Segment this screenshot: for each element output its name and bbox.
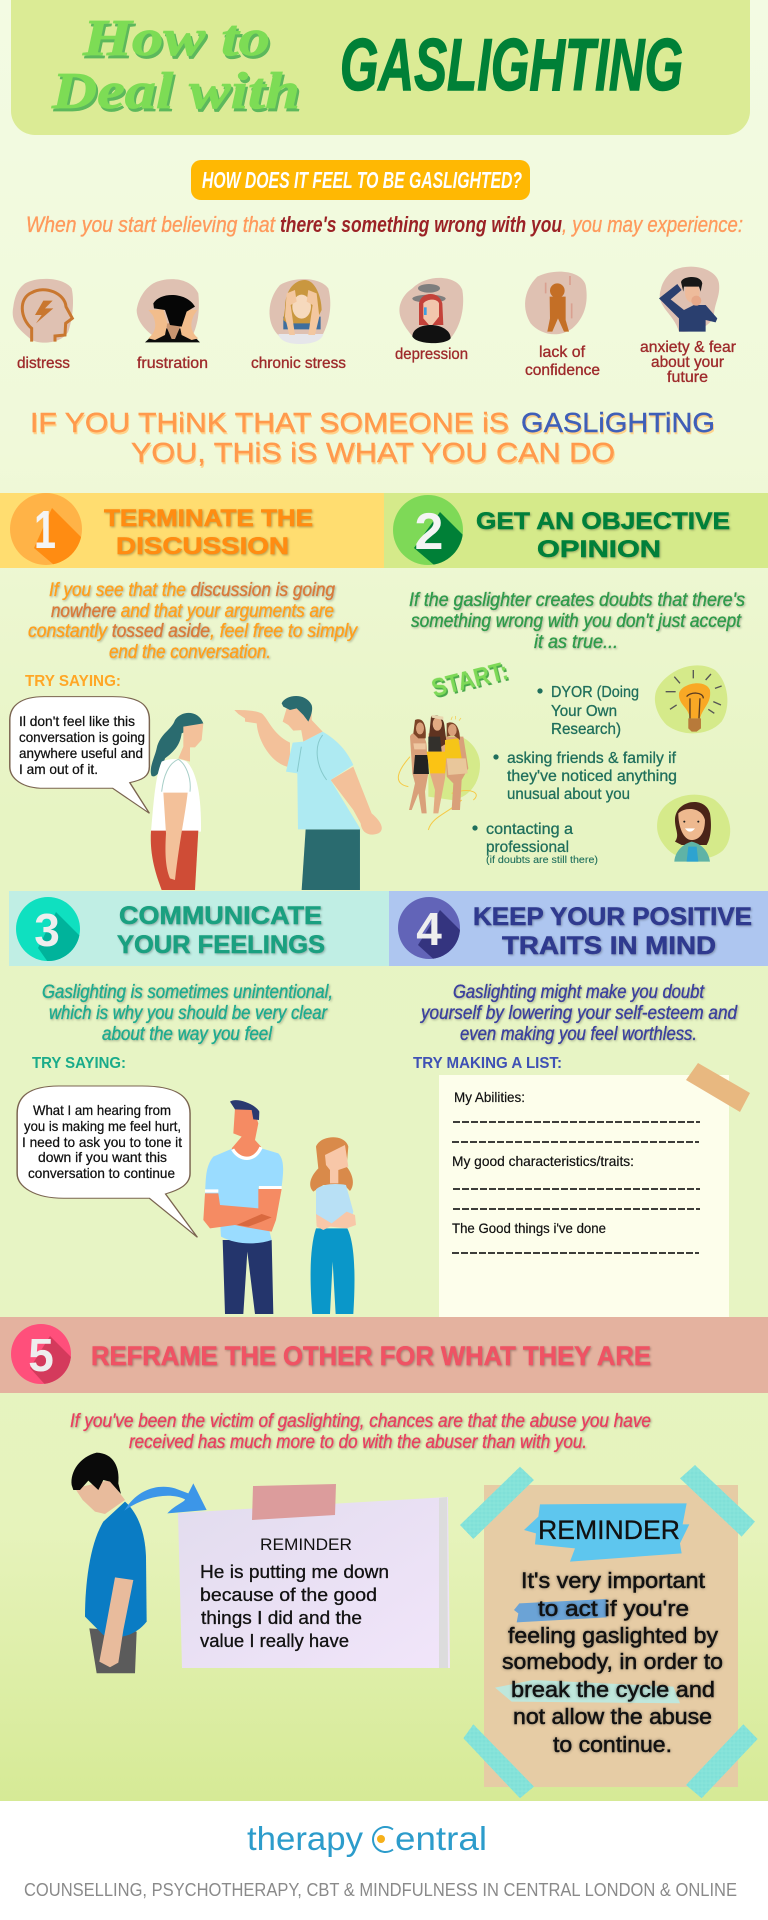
note: reminder: things I did and the bbox=[201, 1608, 362, 1628]
label: chronic stress: chronic stress bbox=[251, 355, 346, 372]
panel: step 5 bbox=[0, 1317, 768, 1798]
heading: what you can do bbox=[30, 407, 715, 468]
note: reminder: He is putting me down bbox=[200, 1562, 389, 1582]
list: research suggestions: asking friends & family if bbox=[507, 750, 677, 767]
speech bubble: step 1 bbox=[10, 697, 149, 813]
illustration: professional bbox=[657, 795, 730, 862]
label: try saying: TRY SAYING: bbox=[25, 673, 121, 690]
step 4 description: Gaslighting might make you doubt bbox=[453, 982, 705, 1003]
icon: chronic stress bbox=[270, 279, 330, 344]
step 2 title bbox=[476, 508, 730, 563]
panel: step 1 bbox=[0, 493, 384, 890]
list prompts bbox=[452, 1089, 634, 1236]
speech bubble: step 3: I need to ask you to tone it bbox=[22, 1134, 182, 1150]
band: step 4 header bbox=[389, 891, 768, 966]
step 4 title: TRAITS IN MIND bbox=[502, 932, 716, 960]
badge: number 1 bbox=[10, 493, 82, 565]
step 1 description: constantly tossed aside, feel free to simply bbox=[28, 621, 358, 642]
step 5 description bbox=[70, 1411, 651, 1453]
step 1 title bbox=[104, 505, 313, 560]
intro sentence bbox=[26, 212, 743, 237]
step 5 description: If you've been the victim of gaslighting, chances are that the abuse you have bbox=[70, 1411, 651, 1432]
list: research suggestions: unusual about you bbox=[507, 786, 630, 803]
label: anxiety and fear: anxiety & fear bbox=[640, 339, 737, 356]
icon: frustration bbox=[137, 279, 200, 342]
title: How to Deal with bbox=[51, 10, 300, 120]
badge: number 5: 5 bbox=[28, 1329, 54, 1381]
note: reminder: because of the good bbox=[200, 1585, 377, 1605]
step 1 description: end the conversation. bbox=[109, 642, 271, 663]
step 2 title: OPINION bbox=[537, 536, 661, 563]
illustration: arguing couple bbox=[151, 696, 382, 890]
speech bubble: step 1: Il don't feel like this bbox=[19, 713, 135, 729]
speech bubble: step 1: I am out of it. bbox=[19, 761, 98, 777]
step 4 description bbox=[419, 982, 738, 1045]
badge: number 4 bbox=[398, 897, 460, 959]
step 4 description: even making you feel worthless. bbox=[460, 1024, 697, 1045]
icon: lack of confidence bbox=[525, 272, 587, 334]
badge: number 4: 4 bbox=[416, 903, 442, 955]
highlights bbox=[495, 1599, 680, 1703]
note: list paper bbox=[439, 1063, 750, 1317]
swash behind reminder bbox=[524, 1503, 689, 1562]
list prompts: My Abilities: bbox=[454, 1089, 525, 1105]
step 3 description: about the way you feel bbox=[102, 1024, 273, 1045]
speech bubble: step 3: down if you want this bbox=[38, 1149, 167, 1165]
label: lack of confidence: lack of bbox=[539, 344, 586, 361]
step 5 title: REFRAME THE OTHER FOR WHAT THEY ARE bbox=[91, 1341, 651, 1371]
label: distress: distress bbox=[17, 355, 70, 372]
intro sentence: When you start believing that bbox=[26, 212, 276, 237]
step 1 description: nowhere and that your arguments are bbox=[51, 601, 334, 622]
speech bubble: step 3 bbox=[17, 1086, 197, 1237]
heading: what you can do: IF YOU THiNK THAT SOMEONE iS bbox=[30, 407, 509, 438]
step 2 description bbox=[409, 590, 745, 653]
panel: step 3 bbox=[9, 891, 389, 1314]
panel: footer bbox=[0, 1801, 768, 1920]
intro sentence: there's something wrong with you bbox=[280, 212, 562, 237]
band: step 1 header bbox=[0, 493, 384, 568]
panel: header bbox=[11, 0, 750, 135]
badge: number 2: 2 bbox=[415, 503, 443, 561]
illustration: friends bbox=[398, 715, 480, 830]
step 3 title: COMMUNICATE bbox=[119, 902, 322, 930]
speech bubble: step 3: you is making me feel hurt, bbox=[24, 1118, 181, 1134]
subheading pill: HOW DOES IT FEEL TO BE GASLIGHTED? bbox=[202, 167, 522, 193]
note: reminder bbox=[178, 1484, 450, 1668]
label: lack of confidence bbox=[525, 344, 600, 379]
card: reminder: It's very important bbox=[521, 1568, 705, 1593]
badge: number 2 bbox=[393, 495, 463, 565]
card: reminder: somebody, in order to bbox=[502, 1649, 723, 1674]
icon: light bulb bbox=[655, 665, 727, 733]
card: reminder: break the cycle and bbox=[511, 1677, 715, 1702]
logo: therapy central bbox=[247, 1820, 487, 1857]
label: start: START: bbox=[429, 657, 511, 703]
card: reminder: not allow the abuse bbox=[513, 1704, 712, 1729]
step 2 description: something wrong with you don't just accept bbox=[411, 611, 742, 632]
label: depression: depression bbox=[395, 346, 468, 363]
step 4 description: yourself by lowering your self-esteem and bbox=[419, 1003, 738, 1024]
label: try saying: TRY SAYING: bbox=[32, 1055, 126, 1072]
badge: number 1: 1 bbox=[34, 500, 56, 560]
title: How to Deal with: How to bbox=[82, 10, 270, 67]
panel: step 2 bbox=[384, 493, 768, 866]
card: reminder: feeling gaslighted by bbox=[508, 1623, 718, 1648]
card: reminder: REMINDER bbox=[538, 1515, 680, 1545]
icon row: feelings bbox=[13, 267, 737, 386]
list: research suggestions: they've noticed anything bbox=[507, 768, 677, 785]
step 2 title: GET AN OBJECTIVE bbox=[476, 508, 730, 535]
label: anxiety and fear: about your bbox=[651, 354, 725, 371]
speech bubble: step 1: conversation is going bbox=[19, 729, 145, 745]
step 3 description bbox=[42, 982, 333, 1045]
step 4 title bbox=[473, 903, 752, 960]
illustration: couple with crossed arms bbox=[203, 1100, 356, 1314]
note: reminder: REMINDER bbox=[260, 1535, 352, 1554]
label: anxiety and fear: future bbox=[667, 369, 708, 386]
step 4 title: KEEP YOUR POSITIVE bbox=[473, 903, 752, 931]
badge: number 3: 3 bbox=[34, 904, 60, 956]
label: frustration: frustration bbox=[137, 355, 208, 372]
badge: number 3 bbox=[16, 897, 80, 961]
step 5 description: received has much more to do with the abuser than with you. bbox=[129, 1432, 587, 1453]
list: research suggestions: Your Own bbox=[551, 703, 617, 720]
label: try making a list: TRY MAKING A LIST: bbox=[413, 1055, 562, 1072]
list prompts: The Good things i've done bbox=[452, 1220, 606, 1236]
heading: what you can do: GASLiGHTiNG bbox=[521, 407, 715, 438]
icon: anxiety and fear bbox=[659, 267, 719, 332]
heading: what you can do: YOU, THiS iS WHAT YOU CAN DO bbox=[131, 437, 615, 468]
list: research suggestions: contacting a bbox=[486, 821, 573, 838]
list: research suggestions: DYOR (Doing bbox=[551, 684, 639, 701]
step 3 description: Gaslighting is sometimes unintentional, bbox=[42, 982, 333, 1003]
step 2 description: If the gaslighter creates doubts that there's bbox=[409, 590, 745, 611]
card: reminder: to continue. bbox=[553, 1732, 672, 1757]
list: research suggestions: Research) bbox=[551, 721, 621, 738]
title: How to Deal with: Deal with bbox=[51, 63, 300, 120]
step 1 title: TERMINATE THE bbox=[104, 505, 313, 532]
step 1 description bbox=[28, 580, 358, 663]
arrow: thought to note bbox=[124, 1483, 207, 1513]
icon: distress bbox=[13, 279, 73, 343]
icon: depression bbox=[399, 278, 463, 343]
step 1 description: If you see that the discussion is going bbox=[49, 580, 335, 601]
logo: therapy central: therapy bbox=[247, 1820, 364, 1857]
step 2 description: it as true... bbox=[534, 632, 618, 653]
list: research suggestions: (if doubts are still there) bbox=[486, 855, 598, 866]
band: step 5 header bbox=[0, 1317, 768, 1393]
step 3 title bbox=[117, 902, 325, 959]
step 1 title: DISCUSSION bbox=[116, 533, 289, 560]
note: reminder: value I really have bbox=[200, 1631, 349, 1651]
speech bubble: step 3: What I am hearing from bbox=[33, 1102, 171, 1118]
label: lack of confidence: confidence bbox=[525, 362, 600, 379]
panel: step 4 bbox=[389, 891, 768, 1317]
badge: number 5 bbox=[11, 1324, 71, 1384]
logo: therapy central: entral bbox=[395, 1820, 487, 1857]
list prompts: My good characteristics/traits: bbox=[452, 1153, 634, 1169]
band: step 3 header bbox=[9, 891, 389, 966]
card: reminder: to act if you're bbox=[538, 1596, 689, 1621]
label: anxiety and fear bbox=[640, 339, 737, 386]
subheading pill bbox=[191, 160, 530, 200]
list: research suggestions: professional bbox=[486, 839, 569, 856]
step 3 description: which is why you should be very clear bbox=[49, 1003, 328, 1024]
illustration: man looking down bbox=[71, 1453, 147, 1673]
card: reminder bbox=[460, 1465, 758, 1798]
band: step 2 header bbox=[384, 493, 768, 568]
list: research suggestions bbox=[472, 684, 677, 866]
step 3 title: YOUR FEELINGS bbox=[117, 931, 325, 959]
speech bubble: step 3: conversation to continue bbox=[28, 1165, 175, 1181]
speech bubble: step 1: anywhere useful and bbox=[19, 745, 143, 761]
